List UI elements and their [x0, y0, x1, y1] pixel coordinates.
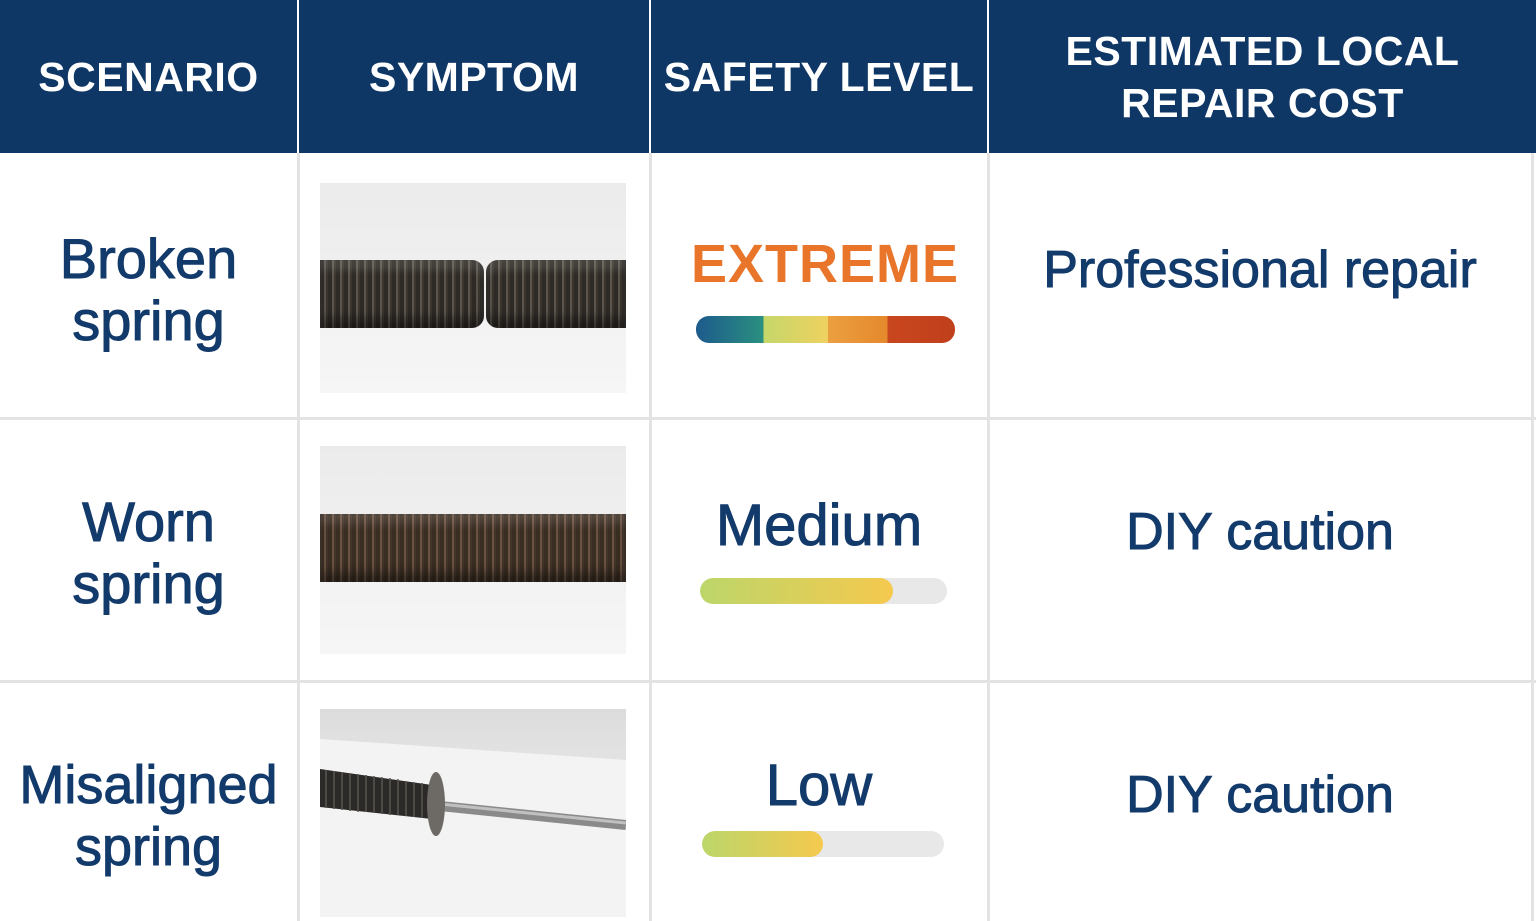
header: safety level: SAFETY LEVEL: [664, 54, 974, 100]
row 1 scenario: Broken spring: [60, 227, 237, 352]
row 3 safety: Low: Low: [766, 752, 872, 818]
header: symptom: [299, 0, 649, 153]
header: estimated local repair cost: ESTIMATED LOCAL: [1066, 28, 1459, 74]
row 2 cost: DIY caution: DIY caution: [1126, 503, 1394, 561]
row 3 scenario: Misaligned spring: Misaligned: [19, 755, 278, 815]
row 2 image: worn spring: [320, 446, 626, 654]
row 2 scenario: Worn spring: spring: [72, 552, 225, 615]
header: scenario: [0, 0, 297, 153]
row 1 bar: full gradient: [696, 316, 955, 343]
row 2 scenario: Worn spring: Worn: [82, 490, 215, 553]
row 1 safety: EXTREME: EXTREME: [691, 234, 959, 294]
row 3 cost: DIY caution: DIY caution: [1126, 766, 1394, 824]
row 1 image: broken spring: [320, 183, 626, 393]
row 2 bar: [700, 578, 947, 604]
header: safety level: [651, 0, 987, 153]
row 1 cost: Professional repair: Professional repair: [1043, 241, 1477, 299]
row 3 bar: [702, 831, 944, 857]
row 1 scenario: Broken spring: spring: [72, 289, 225, 352]
row 3 image: misaligned spring: [320, 709, 626, 917]
row 3 scenario: Misaligned spring: [19, 755, 278, 877]
row 3 scenario: Misaligned spring: spring: [75, 817, 222, 877]
row 2 safety: Medium: Medium: [716, 492, 922, 558]
header: estimated local repair cost: [989, 0, 1536, 153]
row 2 scenario: Worn spring: [72, 490, 225, 615]
header: scenario: SCENARIO: [38, 54, 259, 100]
row 1 scenario: Broken spring: Broken: [60, 227, 237, 290]
header: symptom: SYMPTOM: [369, 54, 579, 100]
header: estimated local repair cost: REPAIR COST: [1121, 80, 1404, 126]
